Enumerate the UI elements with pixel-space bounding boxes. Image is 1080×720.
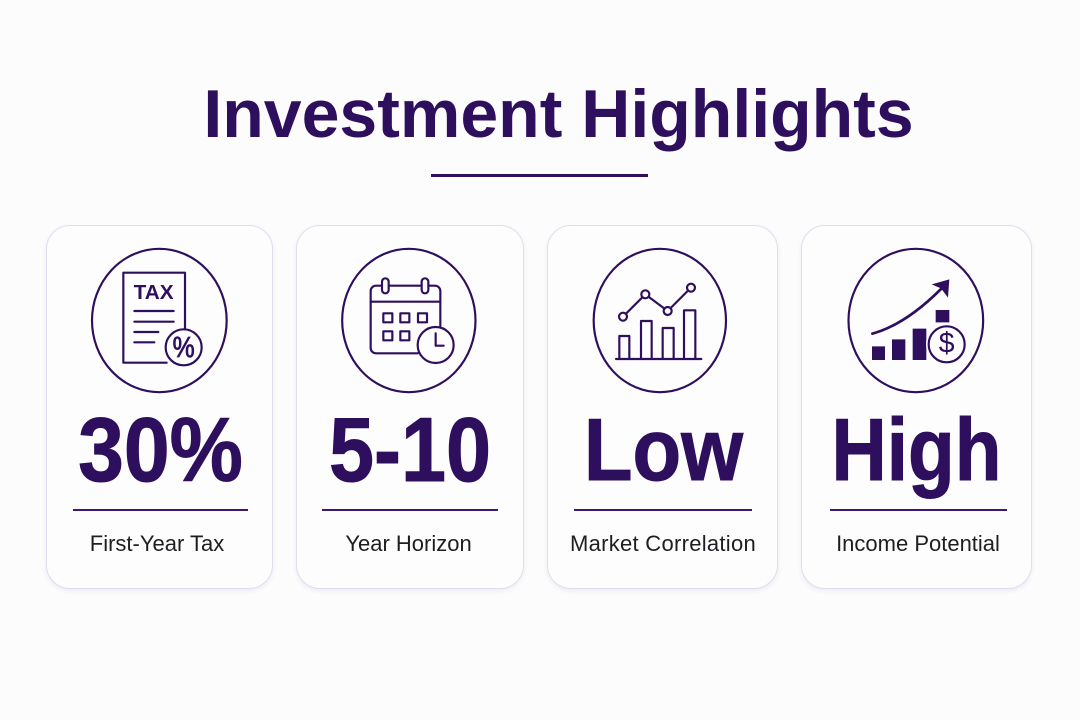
divider: [574, 509, 752, 511]
title underline: [431, 174, 648, 177]
icon: rising bars and coin: $: [939, 328, 955, 360]
icon: tax document: %: [173, 332, 195, 364]
metric label: Market Correlation: [570, 531, 756, 556]
panel: market correlation: [547, 225, 778, 589]
icon: tax document: TAX: [134, 282, 174, 304]
divider: [322, 509, 498, 511]
icon: rising bars and coin: [847, 248, 984, 394]
divider: [830, 509, 1007, 511]
metric value: 5-10: [329, 400, 491, 501]
icon: tax document: [90, 248, 228, 394]
metric value: 30%: [78, 400, 243, 501]
metric label: Year Horizon: [345, 531, 472, 556]
icon: line and bar chart: [592, 248, 728, 394]
panel: first-year tax: [46, 225, 273, 589]
panel: year horizon: [296, 225, 524, 589]
metric value: High: [832, 400, 1001, 498]
metric label: First-Year Tax: [90, 531, 224, 556]
icon: calendar and clock: [341, 248, 477, 394]
metric label: Income Potential: [836, 531, 1000, 556]
title: Investment Highlights: [203, 76, 914, 152]
panel: income potential: [801, 225, 1032, 589]
metric value: Low: [584, 400, 743, 498]
divider: [72, 509, 248, 511]
